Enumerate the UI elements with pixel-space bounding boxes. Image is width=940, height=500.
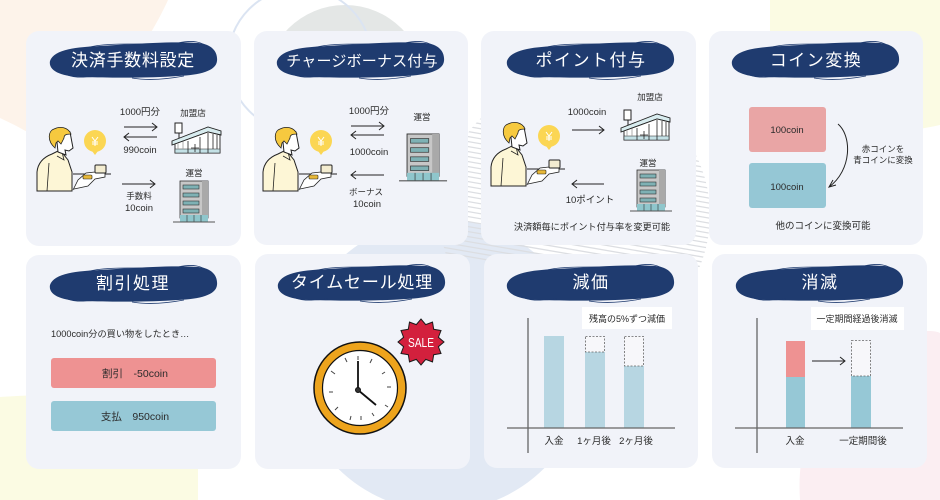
- stacked bar chart: 一定期間後: [839, 435, 887, 447]
- label: 1000coin: 1000coin: [568, 107, 606, 118]
- panel: 割引処理: [26, 255, 241, 469]
- blue coin box: [749, 163, 826, 208]
- panel: タイムセール処理: [255, 254, 470, 469]
- heading: 減価: [507, 264, 674, 302]
- bar chart: 入金: [544, 435, 564, 447]
- red coin box: 100coin: [770, 125, 804, 136]
- heading: タイムセール処理: タイムセール処理: [291, 268, 433, 293]
- discount bar: 割引 -50coin: [102, 367, 168, 380]
- heading: 減価: 減価: [572, 268, 610, 293]
- panel: チャージボーナス付与: [254, 31, 468, 245]
- points arrow: [572, 180, 604, 188]
- panel: ポイント付与: [481, 31, 696, 245]
- icon: operator building: [630, 170, 672, 211]
- icon: person paying: [37, 127, 111, 191]
- charge arrows: [351, 122, 384, 139]
- heading: コイン変換: コイン変換: [770, 46, 862, 71]
- note: 他のコインに変換可能: [775, 220, 871, 232]
- label: ボーナス 10coin: 10coin: [353, 199, 381, 210]
- note: 一定期間経過後消滅: [811, 307, 904, 330]
- heading: 割引処理: [50, 265, 217, 303]
- icon: clock: [314, 342, 406, 434]
- panel: 減価: [484, 254, 698, 468]
- heading: 決済手数料設定: 決済手数料設定: [71, 46, 195, 71]
- panel: 決済手数料設定: [26, 31, 241, 246]
- note: 残高の5%ずつ減価: 残高の5%ずつ減価: [589, 313, 665, 324]
- payment bar: [51, 401, 216, 431]
- note: 一定期間経過後消滅: 一定期間経過後消滅: [816, 313, 898, 324]
- heading: 決済手数料設定: [50, 41, 217, 79]
- panel: コイン変換: [709, 31, 923, 245]
- heading: チャージボーナス付与: [277, 41, 444, 79]
- heading: ポイント付与: ポイント付与: [536, 46, 646, 71]
- icon: store: [621, 110, 670, 140]
- icon: sale badge: SALE: [408, 335, 434, 350]
- note: 決済額毎にポイント付与率を変更可能: [514, 221, 670, 232]
- heading: ポイント付与: [507, 41, 674, 79]
- panel: 消滅: [712, 254, 927, 468]
- note: 残高の5%ずつ減価: [582, 307, 672, 329]
- label: ボーナス 10coin: [349, 187, 383, 210]
- label: 1000coin: 1000coin: [350, 147, 388, 158]
- label: 10ポイント: 10ポイント: [566, 195, 614, 206]
- stacked bar chart: [735, 318, 903, 453]
- icon: operator building: [173, 181, 215, 222]
- icon: person paying: [491, 122, 565, 186]
- heading: 割引処理: 割引処理: [96, 269, 170, 294]
- stacked bar chart: 入金: [785, 435, 805, 447]
- heading: 消滅: [736, 264, 903, 302]
- store exchange arrows: [124, 123, 157, 141]
- heading: コイン変換: [732, 41, 899, 79]
- blue coin box: 100coin: [770, 182, 804, 193]
- fee arrow: [122, 180, 155, 188]
- bar chart: 1ヶ月後: [577, 435, 611, 447]
- bar chart: [507, 318, 675, 453]
- heading: 消滅: 消滅: [802, 268, 838, 293]
- icon: sale badge: [398, 319, 444, 365]
- heading: チャージボーナス付与: チャージボーナス付与: [286, 50, 438, 71]
- label: 加盟店: 加盟店: [637, 92, 663, 102]
- label: 加盟店: 加盟店: [180, 108, 206, 118]
- label: ボーナス 10coin: ボーナス: [349, 187, 383, 197]
- label: conversion: 赤コインを: [862, 144, 904, 154]
- label: 1000円分: 1000円分: [120, 107, 161, 118]
- heading: タイムセール処理: [278, 264, 445, 302]
- icon: store: [172, 123, 221, 153]
- icon: operator building: [399, 134, 447, 181]
- red coin box: [749, 107, 826, 152]
- label: 手数料 10coin: 手数料: [126, 191, 152, 201]
- label: 運営: 運営: [185, 168, 203, 178]
- payment bar: 支払 950coin: [101, 410, 169, 423]
- label: 手数料 10coin: [125, 191, 153, 214]
- label: 1000円分: 1000円分: [349, 106, 390, 117]
- label: conversion: 青コインに変換: [853, 155, 913, 165]
- label: conversion: [853, 144, 913, 165]
- bar chart: 2ヶ月後: [619, 435, 653, 447]
- label: 運営: 運営: [413, 112, 431, 122]
- label: 990coin: 990coin: [123, 145, 157, 156]
- bonus arrow: [351, 171, 384, 179]
- condition text: 1000coin分の買い物をしたとき…: [51, 328, 189, 339]
- icon: person paying: [263, 127, 337, 191]
- purchase arrow: [572, 126, 604, 134]
- label: 運営: 運営: [639, 158, 657, 168]
- discount bar: [51, 358, 216, 388]
- curved arrow: [829, 124, 848, 187]
- label: 手数料 10coin: 10coin: [125, 203, 153, 214]
